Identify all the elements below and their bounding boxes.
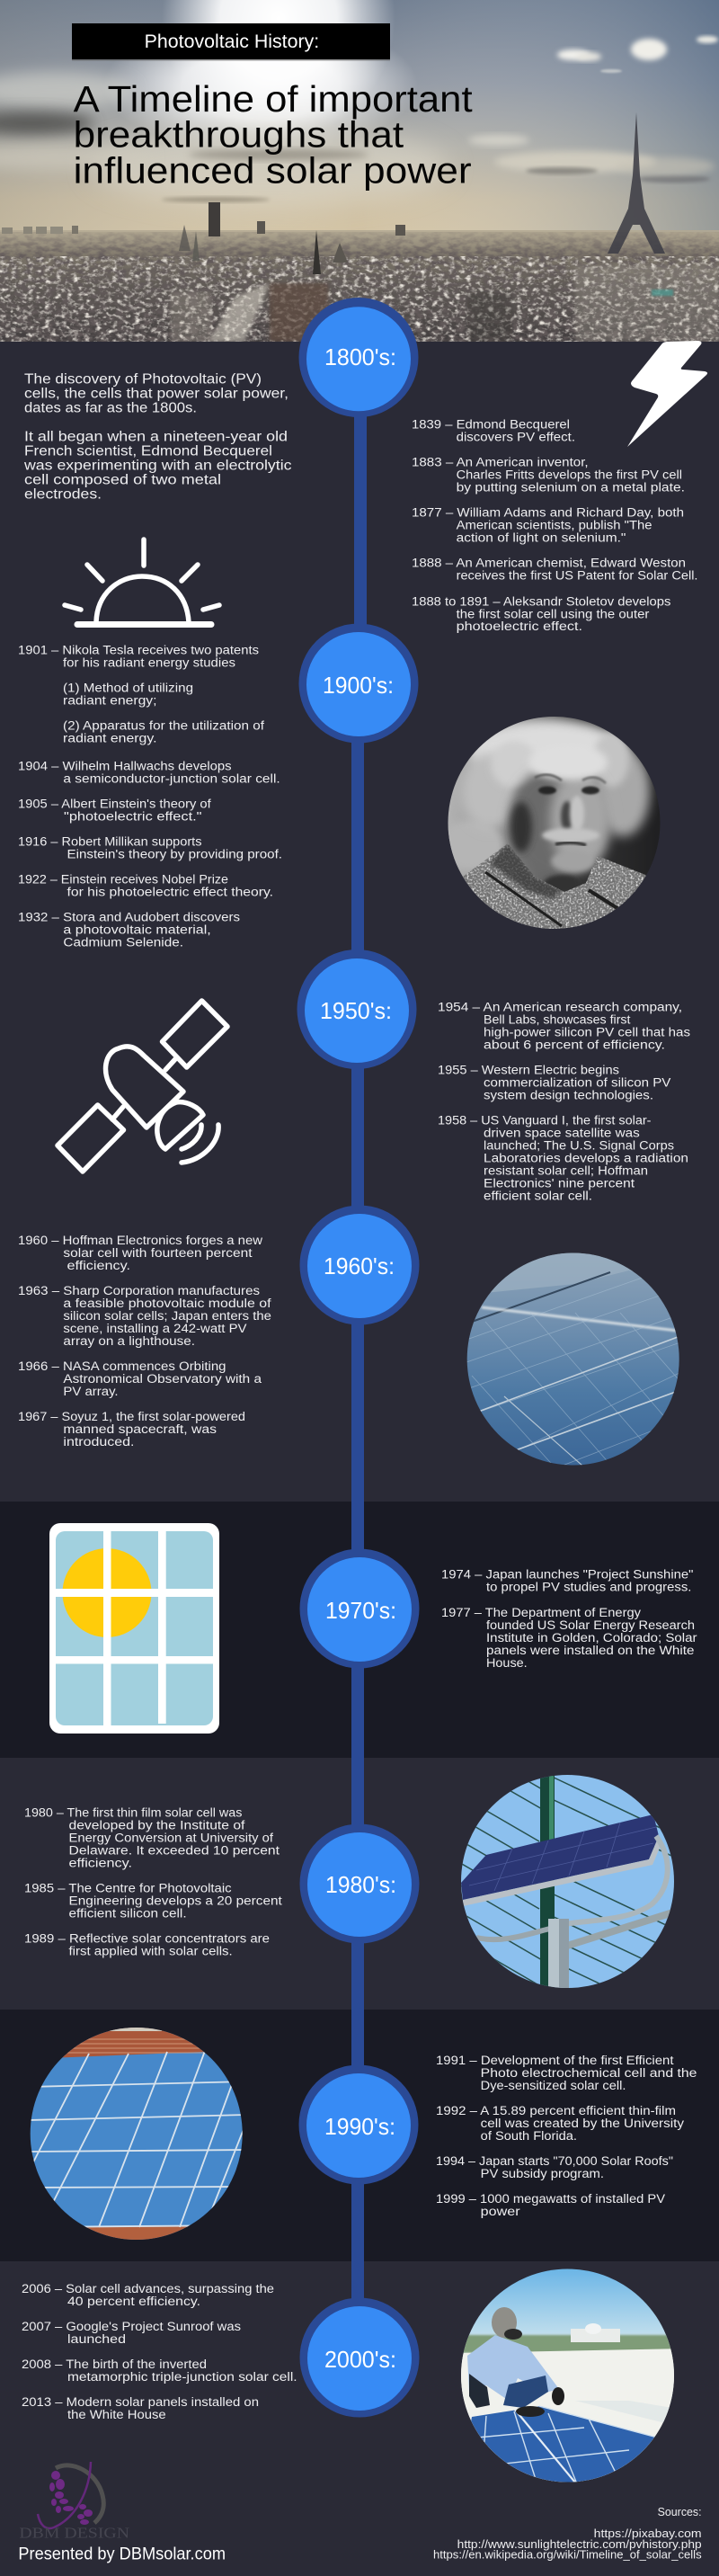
sources: https://pixabay.com xyxy=(594,2527,702,2540)
1960's events: solar cell with fourteen percent xyxy=(63,1246,253,1260)
title block xyxy=(72,23,473,191)
1960's events: Astronomical Observatory with a xyxy=(63,1372,262,1386)
1960's events: 1966 – NASA commences Orbiting xyxy=(18,1359,226,1373)
node: 2000's: 2000's: xyxy=(324,2346,396,2373)
1980's events: 1980 – The first thin film solar cell was xyxy=(24,1806,243,1820)
1800's events: 1888 to 1891 – Aleksandr Stoletov develops xyxy=(412,594,671,608)
node: 1980's: 1980's: xyxy=(325,1871,396,1898)
1990's events: 1991 – Development of the first Efficient xyxy=(436,2054,674,2067)
intro text: electrodes. xyxy=(24,487,102,503)
presented by: Presented by DBMsolar.com xyxy=(18,2545,226,2564)
intro text: French scientist, Edmond Becquerel xyxy=(24,444,272,459)
1990's events xyxy=(436,2054,697,2218)
1950's events: system design technologies. xyxy=(484,1089,653,1102)
1900's events: (1) Method of utilizing xyxy=(63,682,193,695)
photo: rooftop solar array xyxy=(463,1250,683,1475)
node: 1970's xyxy=(300,1548,419,1669)
1950's events: Bell Labs, showcases first xyxy=(484,1013,631,1027)
logo: DBM Design xyxy=(19,2462,129,2542)
1960's events: a feasible photovoltaic module of xyxy=(63,1297,271,1310)
1970's events: to propel PV studies and progress. xyxy=(486,1581,691,1594)
2000's events: metamorphic triple-junction solar cell. xyxy=(67,2370,297,2384)
node: 1950's xyxy=(297,949,417,1069)
photo: technician installing solar panel xyxy=(461,2269,674,2482)
1900's events: a photovoltaic material, xyxy=(63,923,211,937)
1960's events: manned spacecraft, was xyxy=(63,1422,217,1436)
icon: satellite xyxy=(58,1001,227,1172)
1970's events: 1977 – The Department of Energy xyxy=(441,1606,641,1619)
1970's events: founded US Solar Energy Research xyxy=(486,1618,695,1632)
1900's events: 1904 – Wilhelm Hallwachs develops xyxy=(18,760,232,773)
intro text: cell composed of two metal xyxy=(24,473,221,488)
1800's events: receives the first US Patent for Solar Cell. xyxy=(457,569,697,583)
1990's events: 1994 – Japan starts "70,000 Solar Roofs" xyxy=(436,2154,673,2168)
1960's events: scene, installing a 242-watt PV xyxy=(63,1322,247,1335)
1980's events: efficiency. xyxy=(68,1857,132,1870)
1990's events: 1999 – 1000 megawatts of installed PV xyxy=(436,2192,665,2206)
1900's events xyxy=(18,644,282,949)
1900's events: radiant energy; xyxy=(63,694,156,708)
1980's events: Delaware. It exceeded 10 percent xyxy=(68,1844,280,1858)
node: 1800's: 1800's: xyxy=(324,343,396,370)
node: 1950's: 1950's: xyxy=(320,997,392,1024)
1950's events: 1958 – US Vanguard I, the first solar- xyxy=(438,1114,651,1128)
1960's events xyxy=(18,1234,271,1448)
icon: lightning bolt xyxy=(627,341,707,447)
1970's events: Institute in Golden, Colorado; Solar xyxy=(486,1631,697,1645)
1960's events: 1960 – Hoffman Electronics forges a new xyxy=(18,1234,262,1247)
1950's events: commercialization of silicon PV xyxy=(484,1076,670,1090)
2000's events: 40 percent efficiency. xyxy=(67,2295,200,2308)
1800's events: 1877 – William Adams and Richard Day, both xyxy=(412,506,684,520)
node: 1900's xyxy=(298,624,419,743)
1900's events: 1901 – Nikola Tesla receives two patents xyxy=(18,644,259,657)
1900's events: (2) Apparatus for the utilization of xyxy=(63,719,264,733)
1980's events: 1985 – The Centre for Photovoltaic xyxy=(24,1881,232,1894)
1950's events: launched; The U.S. Signal Corps xyxy=(484,1139,674,1153)
2000's events: 2008 – The birth of the inverted xyxy=(22,2358,207,2371)
1900's events: for his photoelectric effect theory. xyxy=(67,886,273,899)
1990's events: Dye-sensitized solar cell. xyxy=(481,2079,626,2092)
1900's events: Cadmium Selenide. xyxy=(63,936,183,949)
1960's events: introduced. xyxy=(63,1435,135,1448)
intro text: The discovery of Photovoltaic (PV) xyxy=(24,372,262,388)
2000's events: 2007 – Google's Project Sunroof was xyxy=(22,2320,241,2333)
2000's events: 2006 – Solar cell advances, surpassing the xyxy=(22,2282,274,2295)
photo: Albert Einstein xyxy=(448,717,660,929)
main title: influenced solar power xyxy=(74,149,472,191)
1800's events: by putting selenium on a metal plate. xyxy=(457,481,685,495)
1900's events: Einstein's theory by providing proof. xyxy=(67,848,282,861)
1900's events: radiant energy. xyxy=(63,732,156,745)
sources xyxy=(433,2506,702,2561)
intro text: was experimenting with an electrolytic xyxy=(23,459,292,474)
1960's events: PV array. xyxy=(63,1385,119,1398)
1950's events: resistant solar cell; Hoffman xyxy=(484,1164,648,1178)
1990's events: of South Florida. xyxy=(481,2129,577,2143)
1950's events: 1955 – Western Electric begins xyxy=(438,1064,619,1077)
2000's events: 2013 – Modern solar panels installed on xyxy=(22,2395,259,2409)
1980's events: Engineering develops a 20 percent xyxy=(68,1894,282,1907)
icon: solar window panel xyxy=(49,1523,219,1734)
1950's events: efficient solar cell. xyxy=(484,1190,592,1203)
1800's events: 1839 – Edmond Becquerel xyxy=(412,418,570,432)
1900's events: "photoelectric effect." xyxy=(64,810,202,824)
node: 1960's xyxy=(300,1205,419,1325)
1950's events xyxy=(438,1001,690,1203)
node: 1800's xyxy=(298,298,419,417)
main title: A Timeline of important xyxy=(74,78,473,120)
sources: https://en.wikipedia.org/wiki/Timeline_of_solar_cells xyxy=(433,2548,702,2561)
intro text xyxy=(23,372,292,503)
1970's events: panels were installed on the White xyxy=(486,1644,694,1657)
1950's events: 1954 – An American research company, xyxy=(438,1001,682,1014)
1960's events: 1967 – Soyuz 1, the first solar-powered xyxy=(18,1410,245,1423)
1950's events: Laboratories develops a radiation xyxy=(484,1152,688,1165)
node: 1980's xyxy=(300,1823,419,1944)
1800's events xyxy=(412,418,697,633)
subtitle box xyxy=(72,23,390,61)
1950's events: high-power silicon PV cell that has xyxy=(484,1026,690,1039)
1800's events: Charles Fritts develops the first PV cell xyxy=(457,468,682,482)
2000's events: the White House xyxy=(67,2408,166,2421)
logo mark xyxy=(38,2462,103,2528)
1800's events: 1888 – An American chemist, Edward Weston xyxy=(412,557,686,570)
timeline spine xyxy=(351,414,367,2300)
intro text: cells, the cells that power solar power, xyxy=(24,387,288,402)
1960's events: silicon solar cells; Japan enters the xyxy=(63,1309,271,1323)
1990's events: cell was created by the University xyxy=(481,2117,684,2130)
hero photo: Paris skyline xyxy=(0,0,719,342)
node: 1960's: 1960's: xyxy=(324,1252,395,1279)
1900's events: 1905 – Albert Einstein's theory of xyxy=(18,798,211,811)
1980's events: 1989 – Reflective solar concentrators are xyxy=(24,1932,270,1946)
1980's events: efficient silicon cell. xyxy=(68,1906,187,1920)
1990's events: 1992 – A 15.89 percent efficient thin-film xyxy=(436,2104,676,2117)
node: 1990's xyxy=(298,2064,419,2185)
node: 1970's: 1970's: xyxy=(325,1597,396,1624)
logo wordmark: DBM DESIGN xyxy=(19,2525,129,2542)
1900's events: 1916 – Robert Millikan supports xyxy=(18,835,202,849)
sources: http://www.sunlightelectric.com/pvhistory.php xyxy=(457,2538,702,2551)
1900's events: 1932 – Stora and Audobert discovers xyxy=(18,911,240,924)
1800's events: 1883 – An American inventor, xyxy=(412,455,589,468)
1990's events: PV subsidy program. xyxy=(481,2167,604,2180)
1900's events: 1922 – Einstein receives Nobel Prize xyxy=(18,873,228,887)
1950's events: Electronics' nine percent xyxy=(484,1177,635,1190)
2000's events: launched xyxy=(67,2332,126,2346)
main title xyxy=(74,78,473,191)
1800's events: American scientists, publish "The xyxy=(457,519,652,532)
1990's events: power xyxy=(481,2205,520,2218)
1950's events: about 6 percent of efficiency. xyxy=(484,1038,665,1052)
photo: pole-mounted solar panel xyxy=(461,1775,674,1988)
1960's events: 1963 – Sharp Corporation manufactures xyxy=(18,1284,260,1297)
1980's events: developed by the Institute of xyxy=(68,1819,245,1832)
1960's events: array on a lighthouse. xyxy=(63,1334,195,1348)
1800's events: action of light on selenium." xyxy=(457,531,626,545)
1800's events: photoelectric effect. xyxy=(457,619,582,633)
1970's events: 1974 – Japan launches "Project Sunshine" xyxy=(441,1568,694,1582)
2000's events xyxy=(22,2282,297,2421)
photo: solar array on tiled roof xyxy=(31,2028,243,2240)
intro text: dates as far as the 1800s. xyxy=(24,401,197,416)
intro text: It all began when a nineteen-year old xyxy=(24,430,288,445)
node: 2000's xyxy=(300,2298,419,2417)
1970's events: House. xyxy=(486,1656,528,1670)
1800's events: discovers PV effect. xyxy=(457,431,575,444)
icon: rising sun xyxy=(65,539,219,624)
node: 1900's: 1900's: xyxy=(323,672,394,699)
1900's events: for his radiant energy studies xyxy=(63,656,235,670)
1990's events: Photo electrochemical cell and the xyxy=(481,2066,697,2080)
1980's events: first applied with solar cells. xyxy=(68,1945,233,1958)
node: 1990's: 1990's: xyxy=(324,2113,395,2140)
1950's events: driven space satellite was xyxy=(484,1127,640,1140)
1960's events: efficiency. xyxy=(67,1259,130,1272)
main title: breakthroughs that xyxy=(74,113,404,155)
subtitle box: Photovoltaic History: xyxy=(145,31,319,52)
sources: Sources: xyxy=(658,2506,702,2518)
1980's events xyxy=(24,1806,282,1958)
1980's events: Energy Conversion at University of xyxy=(68,1832,273,1845)
1800's events: the first solar cell using the outer xyxy=(457,607,650,620)
1970's events xyxy=(441,1568,697,1670)
1900's events: a semiconductor-junction solar cell. xyxy=(63,772,280,786)
